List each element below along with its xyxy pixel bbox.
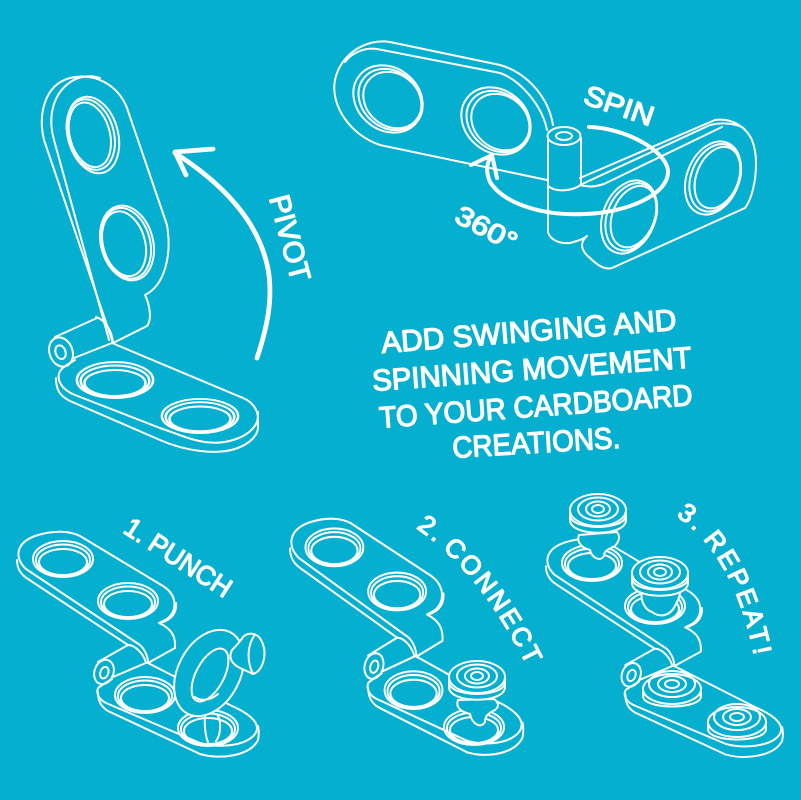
text: 3. REPEAT! <box>678 504 772 654</box>
intro text: TO YOUR CARDBOARD <box>378 379 694 435</box>
arrow: pivot <box>175 149 270 358</box>
illustration: spinning connector <box>334 41 756 268</box>
step 1 label: 1. PUNCH <box>119 512 237 603</box>
illustration: pivoting connector <box>42 76 258 452</box>
step 3 illustration: repeat <box>546 494 783 757</box>
arrow: spin 360 <box>471 127 668 214</box>
label: 360 degrees: 360° <box>450 200 523 257</box>
intro text: SPINNING MOVEMENT <box>371 342 693 398</box>
intro text: CREATIONS. <box>451 422 621 465</box>
label: pivot: PIVOT <box>262 192 316 285</box>
step 2 illustration: connect <box>290 519 523 755</box>
step 2 label <box>416 528 524 660</box>
step 1 illustration: punch <box>17 532 264 757</box>
intro text: ADD SWINGING AND <box>380 304 678 360</box>
text: 2. CONNECT <box>416 516 544 660</box>
step 3 label <box>676 516 755 660</box>
label: spin: SPIN <box>580 79 658 132</box>
intro text <box>371 304 694 465</box>
